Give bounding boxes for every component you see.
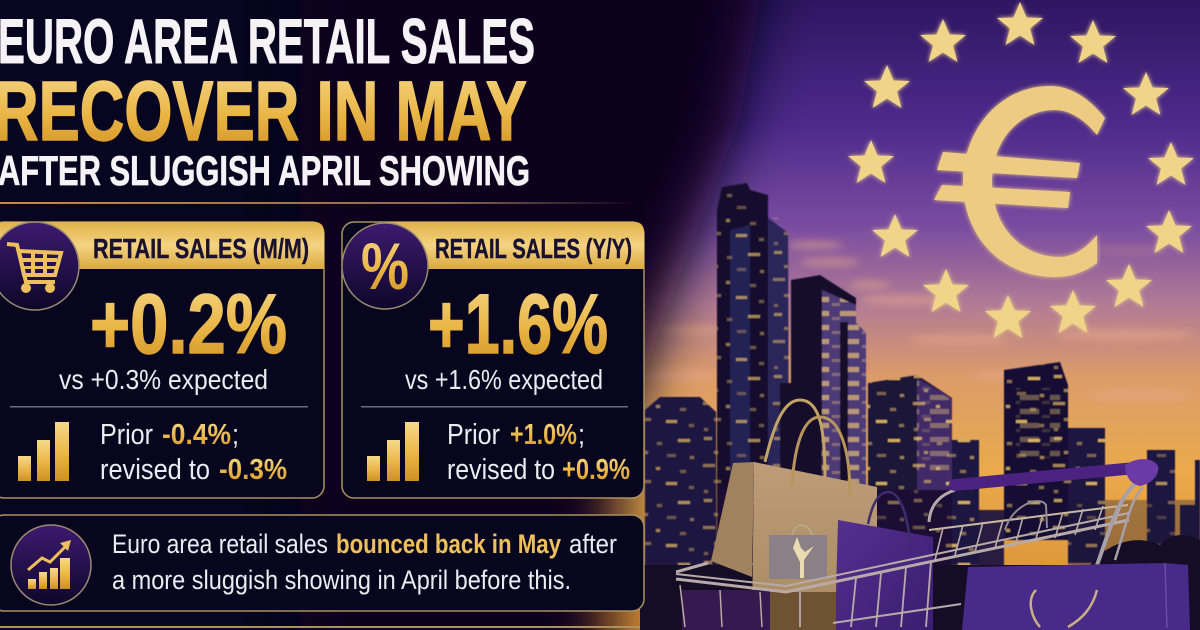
large purple bag — [962, 563, 1190, 630]
headline line 3: AFTER SLUGGISH APRIL SHOWING — [0, 147, 530, 194]
headline line 2: RECOVER IN MAY — [0, 64, 527, 158]
gift box — [769, 525, 827, 579]
title — [0, 7, 535, 194]
expected: vs +1.6% expected — [405, 364, 603, 395]
prior note: revised to — [447, 454, 555, 486]
basket front lower — [682, 590, 836, 630]
prior note: Prior — [447, 419, 500, 451]
icon: euro symbol with ring of stars — [848, 2, 1194, 338]
icon: shopping cart — [0, 222, 79, 310]
kraft bag — [711, 400, 877, 630]
prior note: -0.4% — [162, 419, 231, 451]
tower four — [1004, 362, 1068, 540]
icon: bars — [367, 422, 419, 481]
icon: percent: % — [361, 229, 409, 303]
euro sign — [934, 86, 1105, 277]
hero scene: sky over city — [300, 0, 1200, 630]
icon: growth chart — [11, 525, 91, 605]
low buildings behind cart — [717, 490, 952, 580]
summary text: Euro area retail sales — [112, 529, 328, 559]
tower one — [717, 183, 789, 510]
dark foreground trees and ground — [640, 535, 1200, 630]
cart handle — [955, 467, 1146, 485]
summary text: a more sluggish showing in April before this. — [112, 565, 571, 595]
panel: summary callout — [0, 515, 644, 611]
expected: vs +0.3% expected — [59, 364, 268, 395]
icon: percent — [342, 223, 428, 309]
tower two — [780, 275, 866, 510]
prior note: -0.3% — [219, 454, 287, 486]
prior note: ; — [578, 419, 585, 451]
cart handle grip — [1125, 459, 1158, 486]
summary text: bounced back in May — [336, 529, 561, 559]
prior note: +1.0% — [510, 419, 577, 451]
prior note: ; — [232, 419, 239, 451]
star ring — [848, 2, 1194, 338]
main value: +0.2% — [90, 277, 287, 371]
tower three — [868, 375, 952, 540]
card heading: RETAIL SALES (Y/Y) — [435, 233, 632, 264]
prior note — [100, 419, 287, 486]
far buildings — [645, 397, 1200, 628]
prior note — [447, 419, 630, 486]
purple bag — [835, 492, 933, 630]
panel: cropped next callout — [0, 626, 640, 628]
summary text — [112, 529, 617, 595]
icon: bars — [18, 422, 69, 481]
shopping cart with bags — [676, 400, 1190, 630]
card header — [385, 222, 644, 269]
panel: retail sales m/m — [0, 222, 324, 498]
sky fade into panel — [300, 0, 760, 630]
city skyline — [645, 183, 1200, 628]
summary text: after — [569, 529, 617, 559]
card header — [0, 222, 324, 269]
prior note: Prior — [100, 419, 153, 451]
panel: retail sales y/y — [342, 222, 644, 498]
card heading: RETAIL SALES (M/M) — [93, 233, 309, 264]
headline line 1: EURO AREA RETAIL SALES — [0, 7, 535, 77]
prior note: revised to — [100, 454, 210, 486]
prior note: +0.9% — [562, 454, 630, 486]
cart basket wires — [676, 480, 1143, 627]
main value: +1.6% — [428, 277, 608, 371]
